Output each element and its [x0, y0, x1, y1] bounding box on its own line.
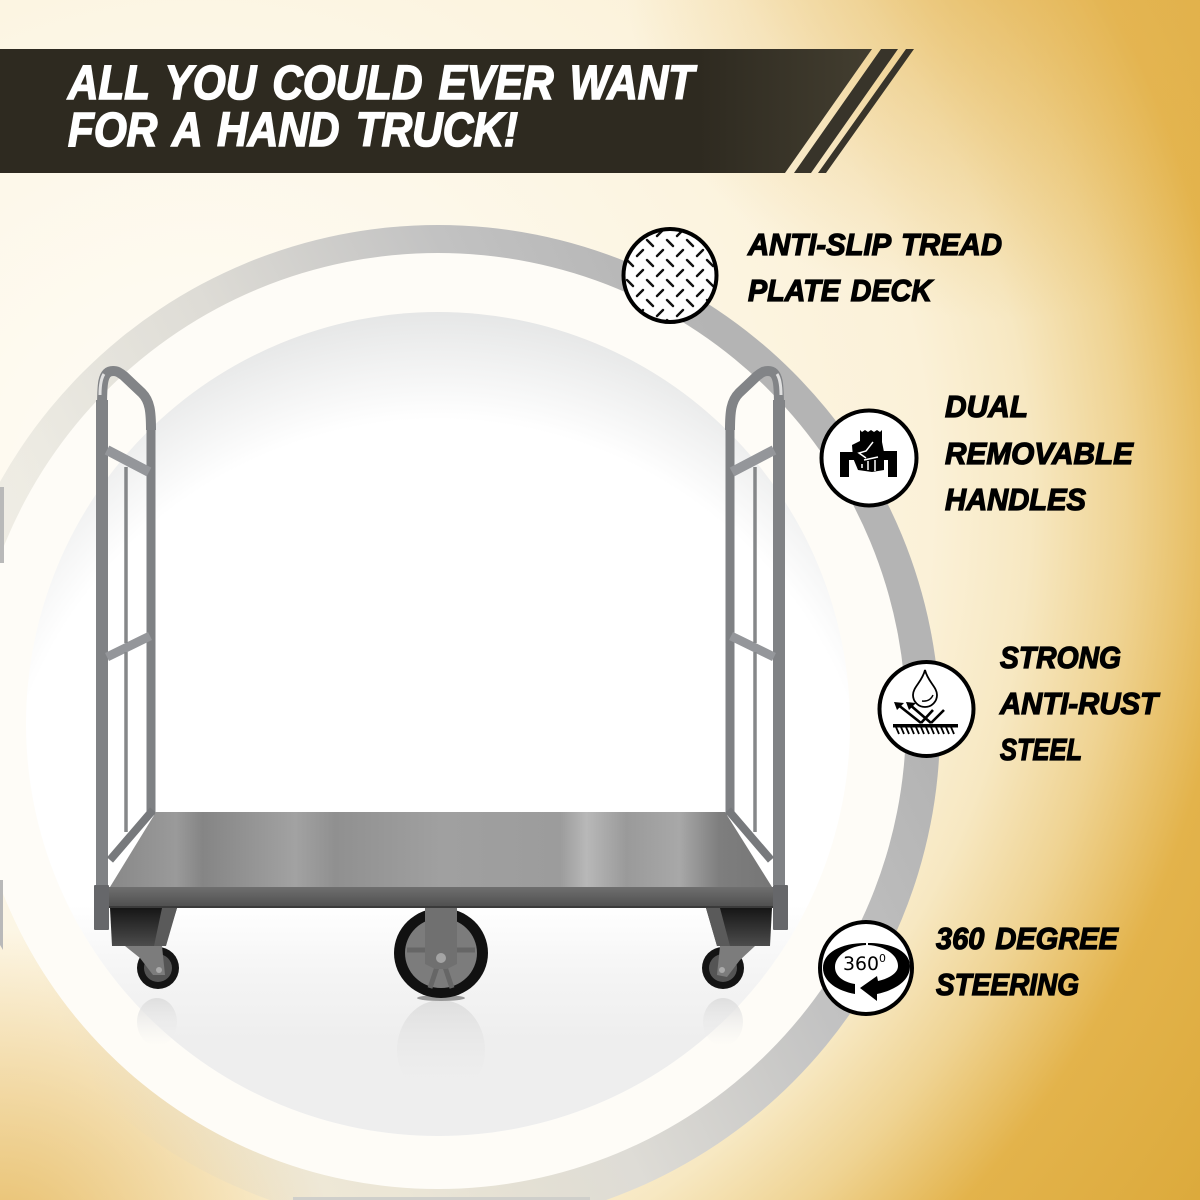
right caster [702, 908, 772, 989]
feature: tread plate [624, 227, 1002, 322]
text: 360 degree steering: STEERING [936, 967, 1079, 1002]
text: dual removable handles: DUAL [945, 389, 1028, 424]
wheel reflections [137, 998, 743, 1100]
icon: 360 degree rotation [820, 922, 912, 1014]
label: 360 degrees: 360 [843, 953, 879, 975]
text: anti-slip tread plate deck: ANTI-SLIP TREAD [747, 227, 1002, 262]
text: strong anti-rust steel: STEEL [1000, 732, 1082, 767]
feature: handles [822, 389, 1134, 517]
title: ALL YOU COULD EVER WANT [67, 57, 697, 110]
text: strong anti-rust steel [999, 640, 1161, 767]
center wheel [394, 907, 488, 1001]
text: dual removable handles: HANDLES [945, 482, 1086, 517]
text: anti-slip tread plate deck [747, 227, 1002, 308]
right handle frame [728, 371, 781, 885]
text: dual removable handles [945, 389, 1134, 517]
left caster [110, 908, 179, 989]
text: dual removable handles: REMOVABLE [945, 436, 1134, 471]
deck [94, 812, 788, 930]
text: 360 degree steering [936, 921, 1119, 1002]
left handle frame [100, 371, 153, 885]
feature: anti-rust [880, 640, 1161, 767]
title: FOR A HAND TRUCK! [68, 104, 518, 157]
label: 360 degrees: 0 [879, 952, 886, 965]
text: strong anti-rust steel: ANTI-RUST [999, 686, 1161, 721]
title [67, 57, 697, 157]
text: 360 degree steering: 360 DEGREE [936, 921, 1119, 956]
background rings [0, 225, 940, 1200]
hand truck [94, 371, 788, 1100]
feature: steering [820, 921, 1119, 1014]
text: anti-slip tread plate deck: PLATE DECK [748, 273, 934, 308]
text: strong anti-rust steel: STRONG [1000, 640, 1121, 675]
icon: tread plate [624, 229, 716, 322]
title banner [0, 49, 914, 173]
icon: hand gripping handle [822, 410, 916, 506]
icon: water drop on surface [880, 662, 974, 756]
